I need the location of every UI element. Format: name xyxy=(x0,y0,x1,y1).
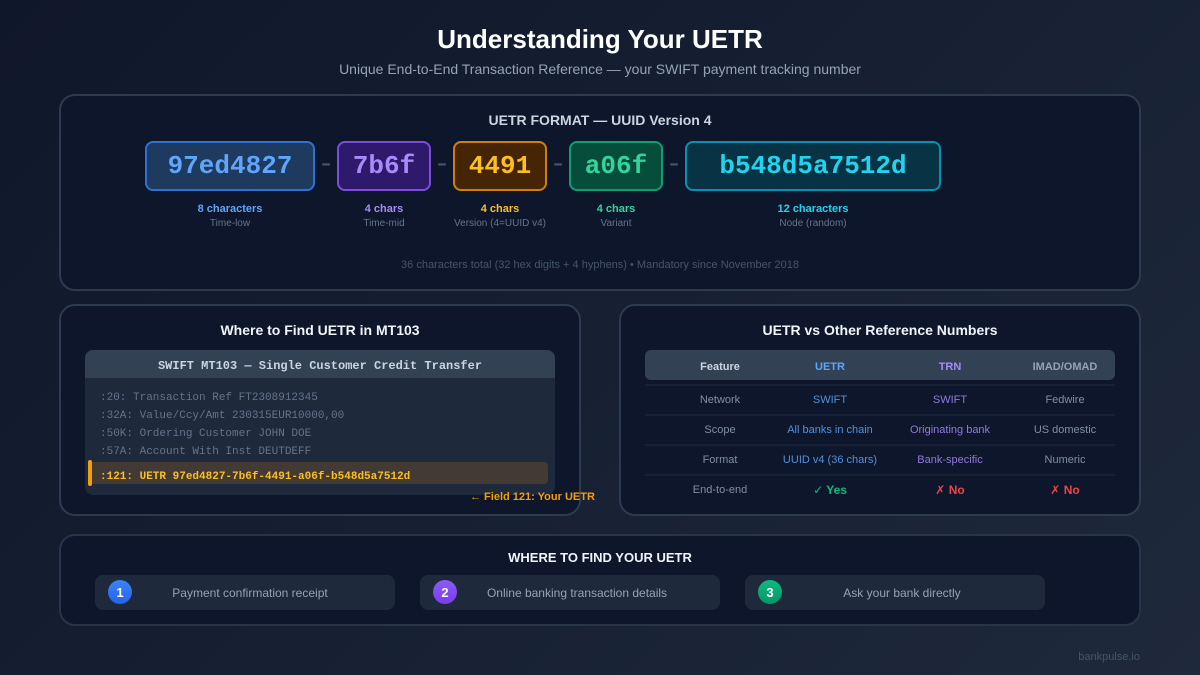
field 121 highlight xyxy=(92,462,548,484)
panel: UETR format xyxy=(59,94,1141,291)
segment: variant: a06f xyxy=(585,151,647,181)
label: 12 characters: 12 characters xyxy=(778,203,848,215)
step 2 background xyxy=(420,575,720,610)
panel: where to find in MT103 xyxy=(59,304,595,516)
step 1 text: Payment confirmation receipt xyxy=(172,586,328,600)
field 57A: :57A: Account With Inst DEUTDEFF xyxy=(100,446,311,458)
step 3 background xyxy=(745,575,1045,610)
segment: node: b548d5a7512d xyxy=(719,151,907,181)
end-to-end TRN: ✗ No xyxy=(935,483,965,497)
label: version: Version (4=UUID v4) xyxy=(454,218,546,229)
MT103 heading: Where to Find UETR in MT103 xyxy=(220,322,420,338)
row: network: Network xyxy=(700,394,740,406)
step 2 badge xyxy=(433,580,457,604)
highlight accent bar xyxy=(88,460,92,486)
title: Understanding Your UETR xyxy=(437,24,763,54)
panel: comparison table xyxy=(619,304,1141,516)
step 1 background xyxy=(95,575,395,610)
scope TRN: Originating bank xyxy=(910,424,990,436)
label: 4 chars purple: 4 chars xyxy=(365,203,403,215)
column head: UETR: UETR xyxy=(815,361,845,373)
label: 8 characters: 8 characters xyxy=(198,203,262,215)
table heading: UETR vs Other Reference Numbers xyxy=(763,322,997,338)
scope IMAD: US domestic xyxy=(1034,424,1096,436)
field 121 text: :121: UETR 97ed4827-7b6f-4491-a06f-b548d5a7512d xyxy=(100,471,410,483)
step 1 badge xyxy=(108,580,132,604)
hyphen: - xyxy=(434,150,450,181)
label: 4 chars amber: 4 chars xyxy=(481,203,519,215)
end-to-end IMAD: ✗ No xyxy=(1050,483,1080,497)
panel background xyxy=(59,304,581,516)
format heading: UETR FORMAT — UUID Version 4 xyxy=(489,112,711,128)
table header row xyxy=(645,350,1115,380)
field 20: :20: Transaction Ref FT2308912345 xyxy=(100,392,318,404)
step 3 badge: 3 xyxy=(766,585,774,600)
panel background xyxy=(59,534,1141,626)
hyphen: - xyxy=(666,150,682,181)
column head: TRN: TRN xyxy=(939,361,961,373)
column head: IMAD/OMAD: IMAD/OMAD xyxy=(1033,361,1097,373)
network UETR: SWIFT xyxy=(813,394,847,406)
field 50K: :50K: Ordering Customer JOHN DOE xyxy=(100,428,311,440)
segment: time-mid xyxy=(337,141,431,191)
row: scope: Scope xyxy=(704,424,736,436)
network TRN: SWIFT xyxy=(933,394,967,406)
network IMAD: Fedwire xyxy=(1045,394,1085,406)
format IMAD: Numeric xyxy=(1045,454,1085,466)
label: 4 chars green: 4 chars xyxy=(597,203,635,215)
row: end-to-end: End-to-end xyxy=(693,484,747,496)
row: format: Format xyxy=(703,454,737,466)
step 3 badge xyxy=(758,580,782,604)
footer credit: bankpulse.io xyxy=(1078,651,1140,663)
field 32A: :32A: Value/Ccy/Amt 230315EUR10000,00 xyxy=(100,410,344,422)
scope UETR: All banks in chain xyxy=(787,424,873,436)
message body xyxy=(85,350,555,495)
column head: feature: Feature xyxy=(700,361,740,373)
segment: variant xyxy=(569,141,663,191)
step 2 badge: 2 xyxy=(441,585,449,600)
label: variant: Variant xyxy=(601,218,631,229)
end-to-end UETR: ✓ Yes xyxy=(813,483,847,497)
message header: SWIFT MT103 — Single Customer Credit Transfer xyxy=(158,359,482,373)
label: time-mid: Time-mid xyxy=(363,218,405,229)
label: time-low: Time-low xyxy=(210,218,250,229)
format TRN: Bank-specific xyxy=(917,454,983,466)
segment: time-mid: 7b6f xyxy=(353,151,415,181)
panel background xyxy=(619,304,1141,516)
callout: field 121: ← Field 121: Your UETR xyxy=(470,491,595,503)
step 1 badge: 1 xyxy=(116,585,124,600)
segment: node xyxy=(685,141,941,191)
subtitle: Unique End-to-End Transaction Reference — your SWIFT payment tracking number xyxy=(339,61,861,77)
panel background xyxy=(59,94,1141,291)
segment: time-low xyxy=(145,141,315,191)
step 2 text: Online banking transaction details xyxy=(487,586,667,600)
label: node: Node (random) xyxy=(779,218,847,229)
segment: version: 4491 xyxy=(469,151,531,181)
format footnote: 36 characters total (32 hex digits + 4 hyphens) • Mandatory since November 2018 xyxy=(401,259,799,271)
segment: version xyxy=(453,141,547,191)
hyphen: - xyxy=(318,150,334,181)
format UETR: UUID v4 (36 chars) xyxy=(783,454,877,466)
segment: time-low: 97ed4827 xyxy=(168,151,292,181)
step 3 text: Ask your bank directly xyxy=(843,586,961,600)
steps heading: WHERE TO FIND YOUR UETR xyxy=(508,550,692,565)
message header xyxy=(85,350,555,378)
hyphen: - xyxy=(550,150,566,181)
